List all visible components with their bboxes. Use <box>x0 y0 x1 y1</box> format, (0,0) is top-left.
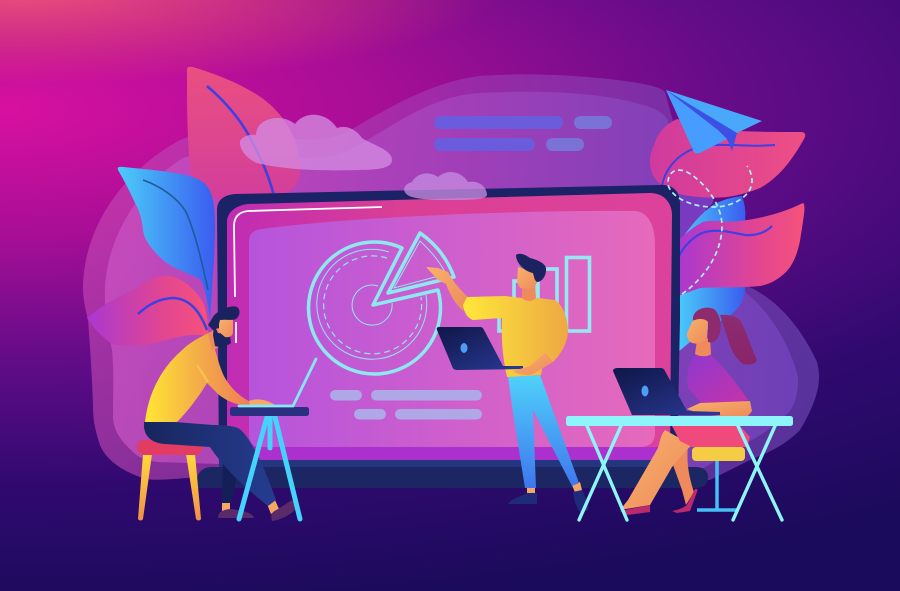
stool seat <box>137 440 202 455</box>
background blob: inner <box>105 92 798 470</box>
screen highlight line <box>234 207 382 343</box>
leaves: right cluster <box>650 119 805 353</box>
leaf: blue left <box>118 167 215 320</box>
neck <box>208 328 222 351</box>
stool legs <box>138 454 201 520</box>
leaf: blue stem lower <box>677 286 745 353</box>
paper plane flight path <box>668 166 752 294</box>
ankles <box>527 482 583 495</box>
shoes <box>218 509 254 518</box>
pie main outline <box>309 242 441 374</box>
face <box>687 319 708 344</box>
hair <box>693 308 721 342</box>
hair <box>516 254 546 282</box>
screen bezel <box>227 193 672 460</box>
skirt <box>672 426 750 447</box>
pie inner ring <box>317 249 427 359</box>
lower text placeholder pills <box>330 390 482 420</box>
torso with arm <box>145 333 251 422</box>
cloud: large <box>240 115 392 170</box>
laptop <box>613 368 720 415</box>
leaf: second right <box>678 203 804 296</box>
pie dashed ring <box>324 256 422 354</box>
back leg <box>672 445 694 505</box>
screen bottom strip <box>227 447 670 460</box>
pie slice inner line <box>394 241 446 288</box>
table legs <box>239 417 300 519</box>
leaf vein: top right <box>662 145 775 186</box>
stool stem and foot <box>697 461 737 510</box>
ankles <box>222 500 279 514</box>
pie slice <box>388 233 454 293</box>
forearm pointing <box>426 267 468 311</box>
laptop logo <box>460 343 468 353</box>
laptop logo <box>642 386 648 396</box>
pie centre circle <box>352 285 392 325</box>
large screen <box>197 185 708 488</box>
rear leg <box>222 447 243 505</box>
screen inner panel <box>249 211 655 447</box>
leaf: large pink top-left <box>187 67 300 200</box>
shoe front <box>620 505 650 515</box>
leaf: lower left pink purple <box>87 276 208 346</box>
person: seated woman on right <box>566 308 793 520</box>
stool seat <box>692 447 745 461</box>
ponytail <box>720 315 757 365</box>
screen dark frame <box>217 185 680 466</box>
table top <box>230 407 309 416</box>
laptop outline <box>239 359 316 406</box>
beard <box>213 325 231 347</box>
screen base top band <box>219 460 677 467</box>
top text placeholder pills <box>434 116 612 151</box>
front leg <box>620 430 692 510</box>
laptop held <box>437 327 523 370</box>
person: seated man on left <box>137 306 316 521</box>
arm <box>687 401 752 416</box>
leaf: top right pink <box>650 119 805 198</box>
pie chart <box>309 233 454 374</box>
cloud: small overlapping screen <box>404 172 487 200</box>
leaf vein: second right <box>678 226 772 258</box>
shoe back <box>672 489 697 513</box>
dark purple stem gap <box>680 194 713 241</box>
leaf: blue stem upper <box>678 196 745 265</box>
paper plane <box>666 90 762 153</box>
shirt <box>687 354 748 405</box>
screen stand base <box>197 467 708 488</box>
arm on hip <box>513 353 553 375</box>
sleeve highlight <box>197 365 208 382</box>
face <box>517 267 538 289</box>
bar chart <box>499 258 590 331</box>
shirt <box>463 296 568 377</box>
table legs <box>579 426 782 520</box>
trousers <box>508 375 579 488</box>
trousers <box>144 422 276 506</box>
hand <box>249 399 275 406</box>
shoes <box>508 493 537 504</box>
neck <box>695 338 711 356</box>
table top <box>566 416 793 426</box>
person: standing man presenting <box>426 254 588 513</box>
neck <box>522 285 536 301</box>
background blob: outer <box>83 74 819 480</box>
hair <box>208 306 240 330</box>
face <box>219 318 233 337</box>
